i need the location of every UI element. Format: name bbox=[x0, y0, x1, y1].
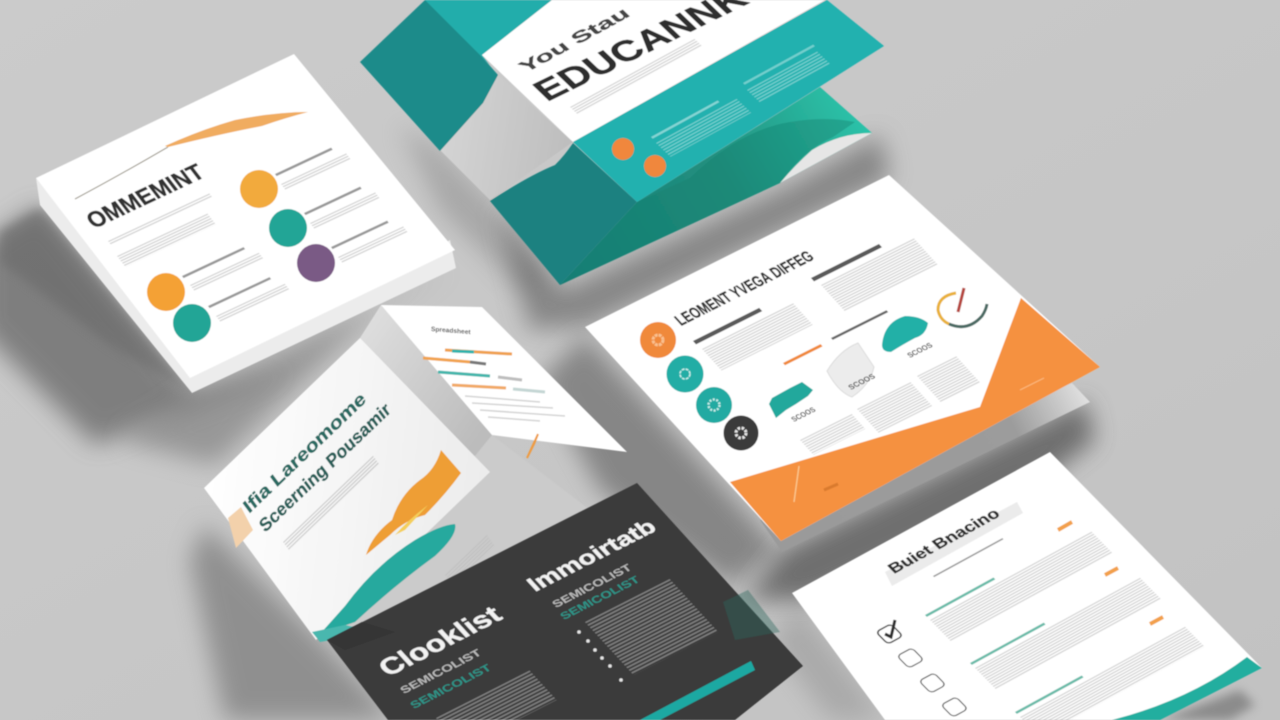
left subheading: SEMICOLIST bbox=[408, 662, 495, 711]
grey inner panel bbox=[440, 75, 573, 200]
circle: orange one bbox=[240, 170, 278, 208]
icon labels: SCOOS bbox=[789, 405, 818, 423]
item three bbox=[1015, 617, 1205, 720]
cover body text bbox=[283, 456, 379, 551]
left subheading: SEMICOLIST bbox=[398, 647, 485, 696]
checkbox: three bbox=[919, 673, 946, 693]
panel bars bbox=[423, 350, 565, 421]
green wash bbox=[723, 590, 780, 640]
small heading: You Stau bbox=[514, 4, 634, 76]
orange panel marks bbox=[794, 378, 1044, 502]
heading highlight bbox=[885, 502, 1023, 586]
cover heading line two: Sceerning Pousamir bbox=[256, 399, 394, 536]
heading: Buiet Bnacino bbox=[885, 506, 1004, 577]
circle: teal one bbox=[269, 209, 307, 247]
right subheading bbox=[550, 562, 643, 622]
icon: grey waves bbox=[827, 343, 874, 397]
right subheading: SEMICOLIST bbox=[550, 562, 635, 610]
fold shadow bbox=[327, 622, 395, 650]
page face bbox=[792, 452, 1262, 720]
peach brush bbox=[228, 507, 253, 548]
circle: teal two bbox=[173, 304, 211, 342]
teal brush bbox=[320, 524, 455, 634]
orange brush bbox=[366, 450, 461, 555]
teal text panel bbox=[573, 0, 884, 202]
circle icon: orange bbox=[640, 322, 676, 358]
light teal corner bbox=[425, 0, 552, 65]
page block thickness bbox=[36, 178, 456, 393]
checkbox: ticked bbox=[876, 620, 903, 644]
teal base bbox=[312, 625, 375, 642]
circle icon: dark bbox=[724, 416, 758, 450]
left body text bbox=[436, 671, 557, 720]
brochure: centre-left folded leaflet bbox=[204, 305, 627, 642]
left subheading bbox=[398, 647, 495, 711]
white right panel bbox=[381, 305, 627, 452]
brochure: top-left with orange brush and coloured circles bbox=[36, 54, 456, 393]
Important heading: Immoirtatb bbox=[521, 515, 661, 596]
sub heading bbox=[933, 538, 1003, 577]
icon: gauge bbox=[938, 288, 987, 327]
page face bbox=[585, 175, 1100, 541]
orange panel bbox=[730, 298, 1100, 541]
circle icon glyphs bbox=[653, 335, 746, 438]
icon labels: SCOOS bbox=[905, 341, 935, 359]
circle icon: teal one bbox=[666, 356, 704, 392]
cover heading line one: Ifia Lareomome bbox=[240, 388, 369, 517]
brochure: centre-right orange infographic bbox=[585, 175, 1100, 552]
under panel bbox=[560, 87, 872, 285]
item one bbox=[925, 522, 1113, 641]
dark teal flap bbox=[360, 0, 498, 151]
orange edge mark bbox=[527, 434, 538, 458]
bullets bbox=[577, 630, 623, 682]
inside faint text bbox=[445, 535, 495, 586]
teal footer strip bbox=[640, 661, 755, 720]
circle: orange dot two bbox=[644, 155, 666, 177]
lower inside panel bbox=[326, 435, 590, 640]
page face bbox=[36, 54, 455, 378]
brochure: dark checklist spread bbox=[327, 483, 803, 720]
icon: teal blob bbox=[882, 316, 928, 352]
brochure: bottom-right checklist page bbox=[792, 452, 1262, 720]
lower page bbox=[760, 383, 1090, 552]
cover page bbox=[204, 338, 490, 640]
heading: LEOMENT YVEGA DIFFEG bbox=[671, 248, 818, 329]
body text on white bbox=[570, 39, 702, 115]
white title panel bbox=[482, 0, 825, 142]
panel small title: Spreadsheet bbox=[431, 326, 471, 336]
circle icon: teal two bbox=[696, 387, 732, 423]
grey fold wall bbox=[360, 305, 492, 462]
checkbox: two bbox=[897, 648, 924, 668]
subheads and text blocks bbox=[693, 238, 981, 455]
icon: teal map bbox=[769, 382, 813, 418]
teal panel text bbox=[651, 45, 830, 157]
right body text bbox=[585, 579, 718, 675]
circle: orange two bbox=[147, 273, 185, 311]
teal wave bbox=[1112, 657, 1262, 720]
brochure: top-centre teal education folder bbox=[360, 0, 884, 285]
dark teal lower fold bbox=[490, 143, 637, 285]
title: OMMEMINT bbox=[81, 159, 210, 234]
circle captions bbox=[182, 148, 408, 322]
icon labels bbox=[789, 341, 935, 423]
checkbox: four bbox=[941, 697, 968, 717]
Checklist heading: Clooklist bbox=[372, 600, 508, 681]
circle: orange dot one bbox=[612, 138, 634, 160]
icon labels: SCOOS bbox=[846, 372, 878, 391]
dark page bbox=[327, 483, 803, 720]
item two bbox=[970, 568, 1161, 689]
circle: purple bbox=[297, 244, 335, 282]
yellow brush bbox=[395, 505, 428, 535]
intro text bbox=[108, 193, 216, 267]
brush stroke bbox=[75, 112, 308, 199]
right subheading: SEMICOLIST bbox=[558, 574, 643, 622]
